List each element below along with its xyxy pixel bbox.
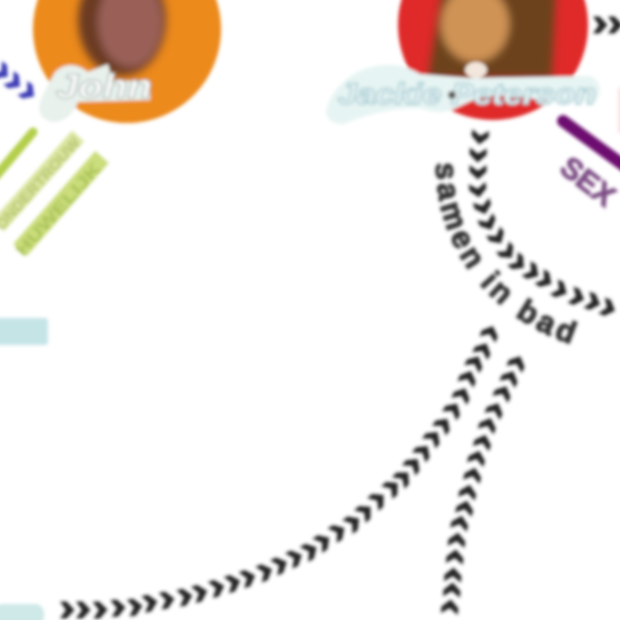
relationship arrow: Jackie to right	[478, 137, 608, 308]
name label background	[39, 64, 150, 122]
name label John: John	[56, 68, 152, 106]
name label background	[326, 65, 600, 124]
relationship arrow: long curve up to bath	[67, 333, 490, 610]
green band	[0, 136, 78, 226]
green label first line	[0, 134, 85, 234]
green band	[20, 157, 102, 250]
green label second line	[12, 157, 106, 260]
portrait hair and face	[428, 0, 556, 78]
orange portrait circle	[33, 0, 221, 123]
blue label box	[0, 318, 48, 345]
person node: John	[33, 0, 221, 123]
relationship arrow: top right	[600, 24, 620, 26]
relationship arrow: vertical curve up to bath	[450, 363, 517, 607]
portrait hair and face	[78, 0, 166, 76]
blue label bottom left	[0, 604, 44, 620]
person node: Jackie Peterson	[326, 0, 600, 124]
caption: SEX: SEX	[554, 151, 620, 213]
name label Jackie Peterson: Jackie Peterson	[338, 78, 596, 111]
green text: HUWELIJK	[12, 159, 106, 260]
purple bar	[563, 121, 620, 170]
red portrait circle	[398, 0, 588, 120]
dark label mark	[448, 91, 456, 99]
green bar	[0, 132, 33, 176]
neck highlight	[465, 62, 487, 78]
relationship arrow: blue	[0, 62, 28, 92]
caption: samen in bad: samen in bad	[432, 160, 580, 346]
pink edge tint	[618, 88, 620, 133]
